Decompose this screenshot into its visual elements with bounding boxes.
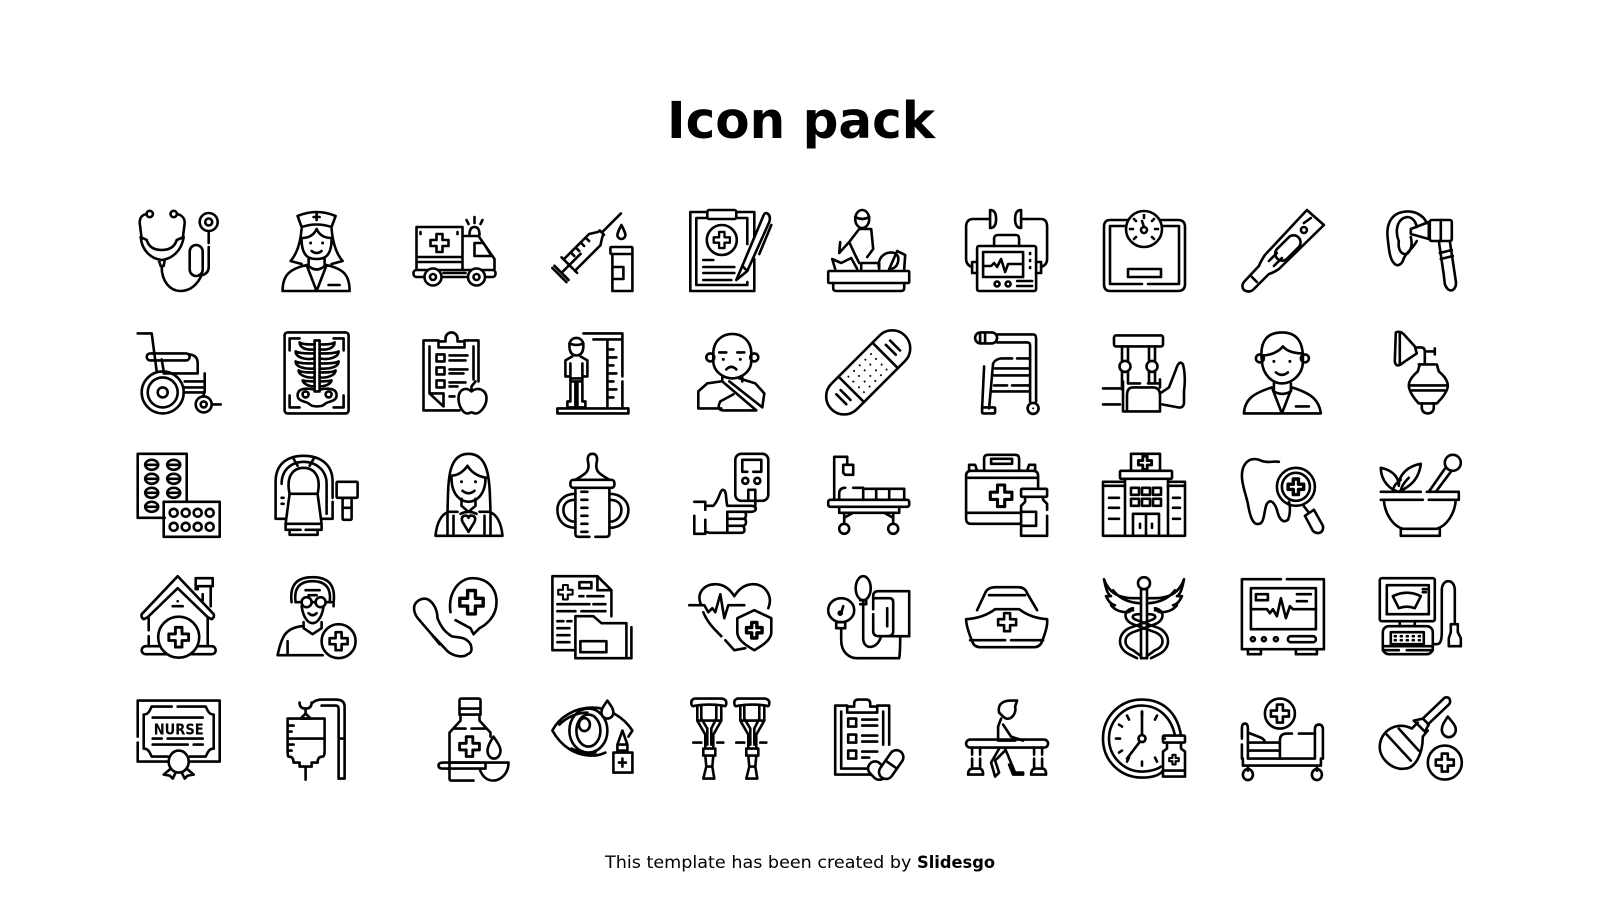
icon: eye drops [552, 701, 632, 773]
title: Icon pack [667, 92, 936, 151]
icon grid [138, 206, 1462, 783]
icon: height measure [557, 333, 628, 413]
icon: home care [141, 576, 216, 658]
icon: IV drip stand [288, 700, 345, 780]
icon: blood pressure monitor [828, 576, 909, 658]
icon: therapist massaging patient [828, 210, 909, 291]
icon: tooth with magnifier [1242, 459, 1323, 533]
icon: glucometer on finger [694, 454, 768, 534]
icon: pill blisters [138, 454, 220, 537]
icon: patient on parallel bars [966, 701, 1048, 777]
icon: walker [975, 332, 1039, 414]
icon: ambulance [414, 217, 496, 286]
icon: phone with medical bubble [414, 578, 496, 656]
icon: defibrillator [966, 210, 1047, 291]
icon: enema bulb [1380, 697, 1462, 780]
icon: nurse [283, 212, 350, 291]
icon: leg traction [1103, 335, 1185, 411]
icon: patient monitor [1242, 579, 1324, 654]
icon: clipboard with pills [835, 700, 906, 783]
icon: clock with vial [1103, 700, 1185, 778]
icon: oxygen bag mask [1395, 332, 1448, 413]
icon: heart with shield [689, 584, 771, 650]
icon: male doctor [1244, 332, 1321, 413]
icon: ultrasound machine [1380, 578, 1461, 654]
icon: clipboard with apple [424, 332, 486, 413]
icon: wheelchair [138, 333, 221, 413]
icon: hospital bed with IV [828, 457, 909, 534]
icon: baby bottle [557, 454, 628, 537]
icon: injured man with sling [698, 334, 764, 410]
footer credit: This template has been created by Slidesgo [604, 853, 995, 872]
icon: otoscope and ear [1387, 211, 1456, 290]
icon: woman [436, 454, 502, 536]
icon: x-ray [285, 332, 349, 413]
icon: patient bed with plus [1242, 699, 1323, 780]
icon: hospital building [1103, 454, 1185, 536]
icon: weight scale [1104, 211, 1185, 291]
icon: nurse certificate [138, 701, 220, 779]
icon: clipboard and pencil [690, 210, 771, 291]
icon: syringe and vial [552, 206, 632, 291]
icon: caduceus [1104, 577, 1184, 658]
icon: first aid kit [966, 455, 1047, 536]
icon: digital thermometer [1242, 210, 1324, 292]
icon: medical documents and folder [552, 576, 631, 658]
icon: medicine bottle with spoon [438, 699, 508, 781]
icon: nurse cap [966, 587, 1047, 647]
icon: crutches [691, 699, 769, 779]
icon: MRI scanner [276, 456, 358, 535]
icon: stethoscope [140, 211, 218, 291]
icon: nurse certificate: NURSE [154, 721, 204, 739]
icon: bandage [819, 323, 918, 422]
icon: old man with plus badge [278, 577, 356, 658]
icon: mortar and pestle [1381, 455, 1461, 536]
